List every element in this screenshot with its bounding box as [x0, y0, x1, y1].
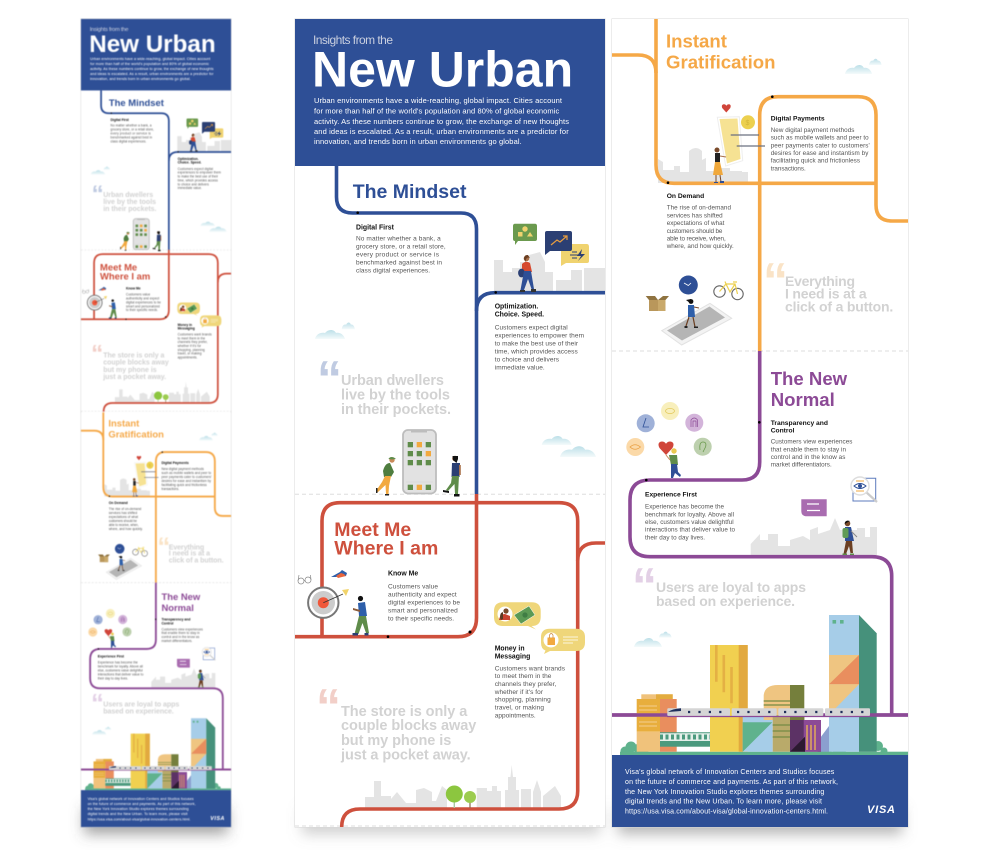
- text: digital payments: New digital payment methods: [771, 127, 854, 134]
- text: digital first: class digital experiences.: [356, 268, 430, 275]
- text: on demand: On Demand: [667, 193, 704, 200]
- quote: everything: I need is at a: [785, 285, 867, 301]
- strip: upper half: Customers value: [126, 293, 150, 297]
- quote: urban dwellers: live by the tools: [341, 387, 450, 403]
- building: yellow tower: [710, 645, 748, 752]
- strip: lower half: https://usa.visa.com/about-visa/global-innovation-centers.html.: [88, 817, 191, 821]
- quote: urban dwellers: “: [317, 351, 342, 407]
- text: know me: smart and personalized: [388, 607, 458, 614]
- strip: upper half: Digital First: [111, 118, 130, 122]
- strip: upper half: and ideas is escalated. As a result, urban environments are a predictor for: [90, 72, 214, 76]
- strip: upper half: Optimization.: [178, 157, 199, 161]
- strip: upper half: smart and personalized: [126, 304, 160, 308]
- strip: upper half: appointments.: [178, 355, 198, 359]
- building: tall tower: [829, 615, 877, 752]
- strip: upper half: New Urban: [89, 31, 216, 58]
- text: money in messaging: Messaging: [495, 653, 530, 660]
- strip: upper half: Know Me: [126, 287, 141, 291]
- strip: lower half: else, customers value delightful: [98, 668, 143, 673]
- strip: lower half: On Demand: [109, 501, 128, 505]
- footer text: digital trends and the New Urban. To learn more, please visit: [625, 799, 822, 806]
- strip: upper half: benchmarked against best in: [111, 135, 152, 139]
- strip: lower half: based on experience.: [103, 708, 174, 716]
- icon: bicycle: [714, 282, 743, 300]
- strip: upper half: for more than half of the world's population and 80% of global economic: [90, 62, 209, 66]
- text: digital payments: desires for ease and instantism by: [771, 150, 869, 157]
- icon: payment phone with coin and heart: $: [746, 120, 750, 127]
- heading: meet me where i am: Where I am: [334, 538, 438, 560]
- strip: upper half: couple blocks away: [103, 360, 169, 367]
- strip: upper half: shopping, planning: [178, 348, 205, 352]
- heading: the new normal: [771, 368, 848, 410]
- quote: the store: couple blocks away: [341, 718, 476, 734]
- strip: upper half: immediate value.: [178, 186, 202, 190]
- footer text: on the future of commerce and payments. As part of this network,: [625, 779, 838, 786]
- building: arch: [764, 685, 804, 752]
- heading: instant gratification: Gratification: [666, 52, 776, 73]
- strip: upper half: to make the best use of their: [178, 175, 218, 179]
- strip: lower half: [81, 412, 231, 827]
- text: optimization choice speed: immediate value.: [495, 364, 545, 371]
- strip: upper half: Messaging: [178, 327, 195, 331]
- strip: upper half: to their specific needs.: [126, 308, 158, 312]
- intro text: and ideas is escalated. As a result, urban environments are a predictor for: [314, 127, 569, 136]
- text: optimization choice speed: to make the best use of their: [495, 340, 579, 347]
- text: money in messaging: channels they prefer,: [495, 681, 557, 688]
- text: experience first: interactions that deliver value to: [645, 527, 735, 534]
- strip: upper half: in their pockets.: [103, 206, 157, 213]
- strip: upper half: Where I am: [100, 271, 150, 282]
- icon: isometric phone with woman: [662, 299, 732, 345]
- text: digital payments: facilitating quick and frictionless: [771, 158, 860, 165]
- strip: lower half: customers should be: [109, 519, 137, 523]
- strip: upper half: The Mindset: [109, 98, 165, 109]
- icon: woman holding heart: [658, 442, 681, 478]
- title: New Urban: [312, 42, 573, 98]
- text: optimization choice speed: Optimization.: [495, 304, 538, 311]
- text: transparency and control: market differentiators.: [771, 462, 832, 469]
- icon: clock: [679, 276, 698, 294]
- strip: upper half: Insights from the: [90, 27, 128, 33]
- icon: woman in yellow skirt: [713, 148, 726, 183]
- quote: urban dwellers: [317, 351, 451, 418]
- transit line: blue: [336, 166, 605, 494]
- strip: upper half: Urban dwellers: [103, 192, 153, 199]
- strip: lower half: such as mobile wallets and peer to: [161, 471, 211, 475]
- strip: lower half: Gratification: [108, 430, 164, 441]
- text: money in messaging: shopping, planning: [495, 697, 551, 704]
- text: digital first: [356, 224, 446, 275]
- strip: lower half: the New York Innovation Studio explores themes surrounding: [88, 807, 189, 811]
- text: on demand: expectations of what: [667, 220, 725, 227]
- icon: hiker with backpack: [842, 521, 857, 555]
- transit line over city: [612, 713, 908, 717]
- strip: lower half: click of a button.: [169, 556, 224, 565]
- heading: instant gratification: Instant: [666, 30, 727, 51]
- transit line: purple: [612, 351, 908, 715]
- strip: lower half: I need is at a: [169, 550, 211, 558]
- panel: poster right column: [612, 19, 908, 827]
- strip: upper half: live by the tools: [103, 199, 156, 206]
- icon: chat bubbles: [513, 224, 589, 266]
- text: transparency and control: that enable them to stay in: [771, 446, 846, 453]
- strip: upper half: activity. As these numbers continue to grow, the exchange of new thoughts: [90, 67, 214, 71]
- heading: the mindset: The Mindset: [353, 181, 467, 203]
- quote: the store: but my phone is: [341, 733, 451, 749]
- quote: urban dwellers: in their pockets.: [341, 402, 451, 418]
- quote: the store: “: [316, 679, 341, 735]
- heading: insights from the: Insights from the: [313, 33, 393, 47]
- strip: lower half: Experience has become the: [98, 661, 138, 665]
- strip: lower half: peer payments cater to customers': [161, 475, 212, 479]
- heading: instant gratification: [666, 30, 776, 73]
- strip: lower half: Visa's global network of Innovation Centers and Studios focuses: [88, 797, 194, 801]
- strip: lower half: The New: [161, 592, 201, 603]
- icon: phone with app grid: [403, 430, 436, 494]
- footer background: [612, 755, 908, 827]
- quote: the store: [316, 679, 476, 763]
- strip: lower half: their day to day lives.: [98, 676, 128, 680]
- text: on demand: where, and how quickly.: [666, 243, 734, 250]
- icon: person walking: [352, 596, 369, 636]
- station dots: [356, 211, 497, 638]
- footer text: Visa's global network of Innovation Centers and Studios focuses: [625, 769, 835, 776]
- text: digital first: No matter whether a bank, a: [356, 236, 441, 243]
- building: bridge: [660, 733, 710, 747]
- footer text: [625, 769, 838, 816]
- icon: person in navy shirt: [443, 456, 461, 496]
- text: know me: Know Me: [388, 571, 418, 578]
- strip: upper half: No matter whether a bank, a: [111, 124, 152, 128]
- quote: users are loyal: Users are loyal to apps: [656, 579, 806, 595]
- strip: lower half: Experience First: [98, 654, 125, 658]
- left column artwork: [295, 19, 605, 827]
- strip: lower half: “: [158, 533, 170, 562]
- bushes and ground: [620, 741, 908, 756]
- text: money in messaging: appointments.: [495, 712, 536, 719]
- text: digital payments: [771, 115, 870, 172]
- strip: lower half: Instant: [108, 419, 140, 430]
- illustration: city with train: [612, 615, 908, 756]
- strip: upper half: travel, or making: [178, 352, 202, 356]
- skyline: gratification: [658, 148, 748, 183]
- strip: lower half: interactions that deliver value to: [98, 672, 144, 676]
- dashed section divider: [295, 493, 605, 495]
- text: money in messaging: whether if it's for: [494, 689, 544, 696]
- strip: lower half: where, and how quickly.: [109, 527, 143, 531]
- strip: lower half: desires for ease and instantism by: [161, 479, 211, 483]
- text: money in messaging: Customers want brands: [495, 665, 566, 672]
- strip: upper half: whether if it's for: [178, 344, 201, 348]
- strip: lower half: Everything: [169, 543, 204, 551]
- icon: target with arrow: [308, 588, 349, 618]
- strip: upper half: time, which provides access: [178, 178, 218, 182]
- footer text: the New York Innovation Studio explores themes surrounding: [625, 789, 824, 796]
- text: transparency and control: Customers view experiences: [771, 439, 852, 446]
- quote: urban dwellers: Urban dwellers: [341, 373, 444, 389]
- quote: everything: “: [763, 253, 788, 309]
- icon: payment phone with coin and heart: [717, 104, 765, 166]
- strip: lower half: expectations of what: [109, 515, 138, 519]
- text: on demand: [666, 193, 734, 250]
- icon: messaging bubble with money: [494, 602, 541, 630]
- icon: glasses: [298, 575, 311, 584]
- skyline: mindset: [494, 252, 605, 291]
- text: on demand: customers should be: [667, 228, 723, 235]
- intro text: [314, 96, 569, 146]
- strip: upper half: The store is only a: [103, 353, 164, 360]
- text: digital first: benchmarked against best in: [356, 260, 442, 267]
- strip: lower half: The rise of on-demand: [109, 507, 142, 511]
- text: experience first: benchmark for loyalty. Above all: [645, 511, 734, 518]
- text: experience first: their day to day lives.: [645, 534, 705, 541]
- building: triangle block: [743, 717, 773, 752]
- clouds: right column: [634, 59, 882, 647]
- text: know me: to their specific needs.: [388, 615, 454, 622]
- text: digital first: Digital First: [356, 224, 395, 231]
- quote: users are loyal: “: [632, 558, 657, 614]
- strip: upper half: authenticity and expect: [126, 297, 159, 301]
- logo: visa: VISA: [867, 804, 895, 816]
- text: transparency and control: Transparency and: [771, 420, 828, 427]
- intro text: activity. As these numbers continue to grow, the exchange of new thoughts: [314, 117, 569, 126]
- icon: purple card: [801, 499, 827, 516]
- strip: upper half: to meet them in the: [178, 336, 205, 340]
- text: digital payments: peer payments cater to customers': [771, 142, 870, 149]
- strip: upper half: Choice. Speed.: [178, 161, 202, 165]
- text: digital payments: Digital Payments: [771, 115, 825, 122]
- strip: lower half: digital trends and the New Urban. To learn more, please visit: [88, 812, 187, 816]
- strip: lower half: Digital Payments: [161, 461, 189, 465]
- right column artwork: [612, 19, 908, 827]
- clouds: upper: [315, 322, 596, 457]
- text: optimization choice speed: time, which provides access: [495, 348, 578, 355]
- strip: upper half: just a pocket away.: [102, 374, 166, 381]
- heading: the new normal: Normal: [771, 389, 835, 410]
- station dots: [645, 95, 774, 481]
- text: know me: digital experiences to be: [388, 599, 460, 606]
- dashed section divider: [612, 350, 908, 352]
- quote: the store: The store is only a: [341, 704, 468, 720]
- text: on demand: The rise of on-demand: [667, 205, 731, 212]
- heading: meet me where i am: [334, 519, 438, 560]
- header background: [295, 19, 605, 166]
- panel: full poster strip thumbnail: [81, 19, 231, 827]
- text: digital first: grocery store, or a retail store,: [356, 244, 446, 251]
- building: purple block: [790, 720, 829, 752]
- transit line: orange: [612, 19, 908, 351]
- icon: senses circles: [626, 402, 712, 456]
- strip: upper half: grocery store, or a retail store,: [111, 128, 154, 132]
- strip: lower half: control and in the know as: [161, 635, 200, 639]
- strip: lower half: VISA: [210, 816, 224, 822]
- strip: upper half: Urban environments have a wide-reaching, global impact. Cities account: [90, 57, 210, 61]
- text: optimization choice speed: Customers expect digital: [495, 324, 568, 331]
- strip: upper half: to choice and delivers: [178, 182, 209, 186]
- heading: the new normal: The New: [771, 368, 848, 389]
- icon: walking person with bag: [518, 255, 536, 292]
- quote: everything: Everything: [785, 273, 855, 289]
- intro text: Urban environments have a wide-reaching, global impact. Cities account: [314, 96, 563, 105]
- text: on demand: able to receive, when,: [667, 236, 726, 242]
- quote: the store: just a pocket away.: [340, 747, 471, 763]
- intro text: innovation, and trends born in urban environments go global.: [314, 137, 522, 146]
- text: optimization choice speed: Choice. Speed.: [495, 312, 544, 319]
- text: digital first: every product or service is: [356, 252, 440, 259]
- text: money in messaging: [494, 645, 566, 719]
- strip: lower half: on the future of commerce and payments. As part of this network,: [88, 802, 196, 806]
- text: optimization choice speed: to choice and delivers: [495, 356, 560, 363]
- icon: person in green jacket: [376, 457, 396, 496]
- quote: everything: [763, 253, 893, 315]
- heading: meet me where i am: Meet Me: [334, 519, 411, 541]
- text: experience first: Experience has become the: [645, 504, 724, 511]
- text: money in messaging: to meet them in the: [495, 673, 552, 680]
- text: experience first: Experience First: [645, 491, 698, 498]
- drop shadows: [84, 808, 902, 834]
- icon: trees: [446, 786, 476, 808]
- strip: lower half: transactions.: [161, 487, 179, 491]
- strip: lower half: services has shifted: [109, 511, 137, 515]
- text: know me: Customers value: [388, 583, 438, 590]
- text: money in messaging: Money in: [495, 645, 525, 652]
- text: optimization choice speed: [495, 304, 584, 371]
- strip: lower half: “: [91, 690, 104, 718]
- text: on demand: services has shifted: [667, 212, 723, 219]
- text: transparency and control: [771, 420, 852, 469]
- strip: upper half: digital experiences to be: [126, 300, 161, 304]
- icon: sneaker: [331, 570, 347, 577]
- strip: upper half: “: [91, 341, 103, 368]
- icon: parcel box: [646, 296, 669, 311]
- strip: lower half: facilitating quick and frictionless: [161, 483, 207, 487]
- strip: upper half: channels they prefer,: [178, 340, 208, 344]
- strip: lower half: Users are loyal to apps: [103, 700, 179, 708]
- strip: upper half: Money in: [178, 323, 192, 327]
- icon: messaging bubble with shopping bag: [541, 629, 585, 654]
- footer text: https://usa.visa.com/about-visa/global-innovation-centers.html.: [625, 809, 828, 816]
- strip: lower half: benchmark for loyalty. Above all: [98, 665, 143, 669]
- skyline: store: [365, 765, 561, 808]
- strip: lower half: Normal: [161, 603, 194, 614]
- text: digital payments: transactions.: [771, 165, 806, 172]
- building: left block: [637, 694, 677, 752]
- strip: lower half: that enable them to stay in: [161, 631, 200, 635]
- text: optimization choice speed: experiences to empower them: [495, 332, 584, 339]
- text: transparency and control: control and in the know as: [771, 454, 845, 461]
- strip: upper half: “: [92, 181, 104, 208]
- quote: users are loyal: [632, 558, 806, 614]
- strip: upper half: Customers expect digital: [178, 167, 213, 171]
- text: experience first: else, customers value delightful: [645, 519, 734, 526]
- panel: poster left column: [295, 19, 605, 827]
- strip: upper half: every product or service is: [111, 132, 151, 136]
- strip: upper half: [81, 19, 231, 412]
- strip: upper half: innovation, and trends born in urban environments go global.: [90, 77, 191, 81]
- text: know me: [388, 571, 460, 622]
- transit line: red: [295, 494, 605, 827]
- train: [667, 708, 870, 716]
- skyline: new normal: [751, 518, 877, 555]
- strip: upper half: Customers want brands: [178, 333, 212, 337]
- text: experience first: [645, 491, 735, 541]
- strip: upper half: class digital experiences.: [111, 139, 146, 143]
- text: digital payments: such as mobile wallets and peer to: [771, 135, 869, 142]
- text: transparency and control: Control: [771, 428, 795, 435]
- strip: upper half: experiences to empower them: [178, 171, 221, 175]
- quote: users are loyal: based on experience.: [656, 593, 795, 609]
- icon: magnifier over document: [851, 477, 877, 502]
- strip: upper half: but my phone is: [103, 367, 157, 374]
- strip: lower half: New digital payment methods: [161, 467, 204, 471]
- intro text: for more than half of the world's population and 80% of global economic: [314, 106, 560, 115]
- text: know me: authenticity and expect: [388, 591, 457, 598]
- strip: lower half: Control: [161, 622, 174, 626]
- text: money in messaging: travel, or making: [495, 704, 544, 712]
- strip: lower half: Customers view experiences: [161, 627, 203, 631]
- strip: lower half: able to receive, when,: [109, 523, 139, 527]
- strip: lower half: Transparency and: [161, 618, 190, 622]
- strip: lower half: market differentiators.: [161, 639, 192, 643]
- quote: everything: click of a button.: [785, 299, 893, 315]
- strip: upper half: Meet Me: [100, 262, 137, 273]
